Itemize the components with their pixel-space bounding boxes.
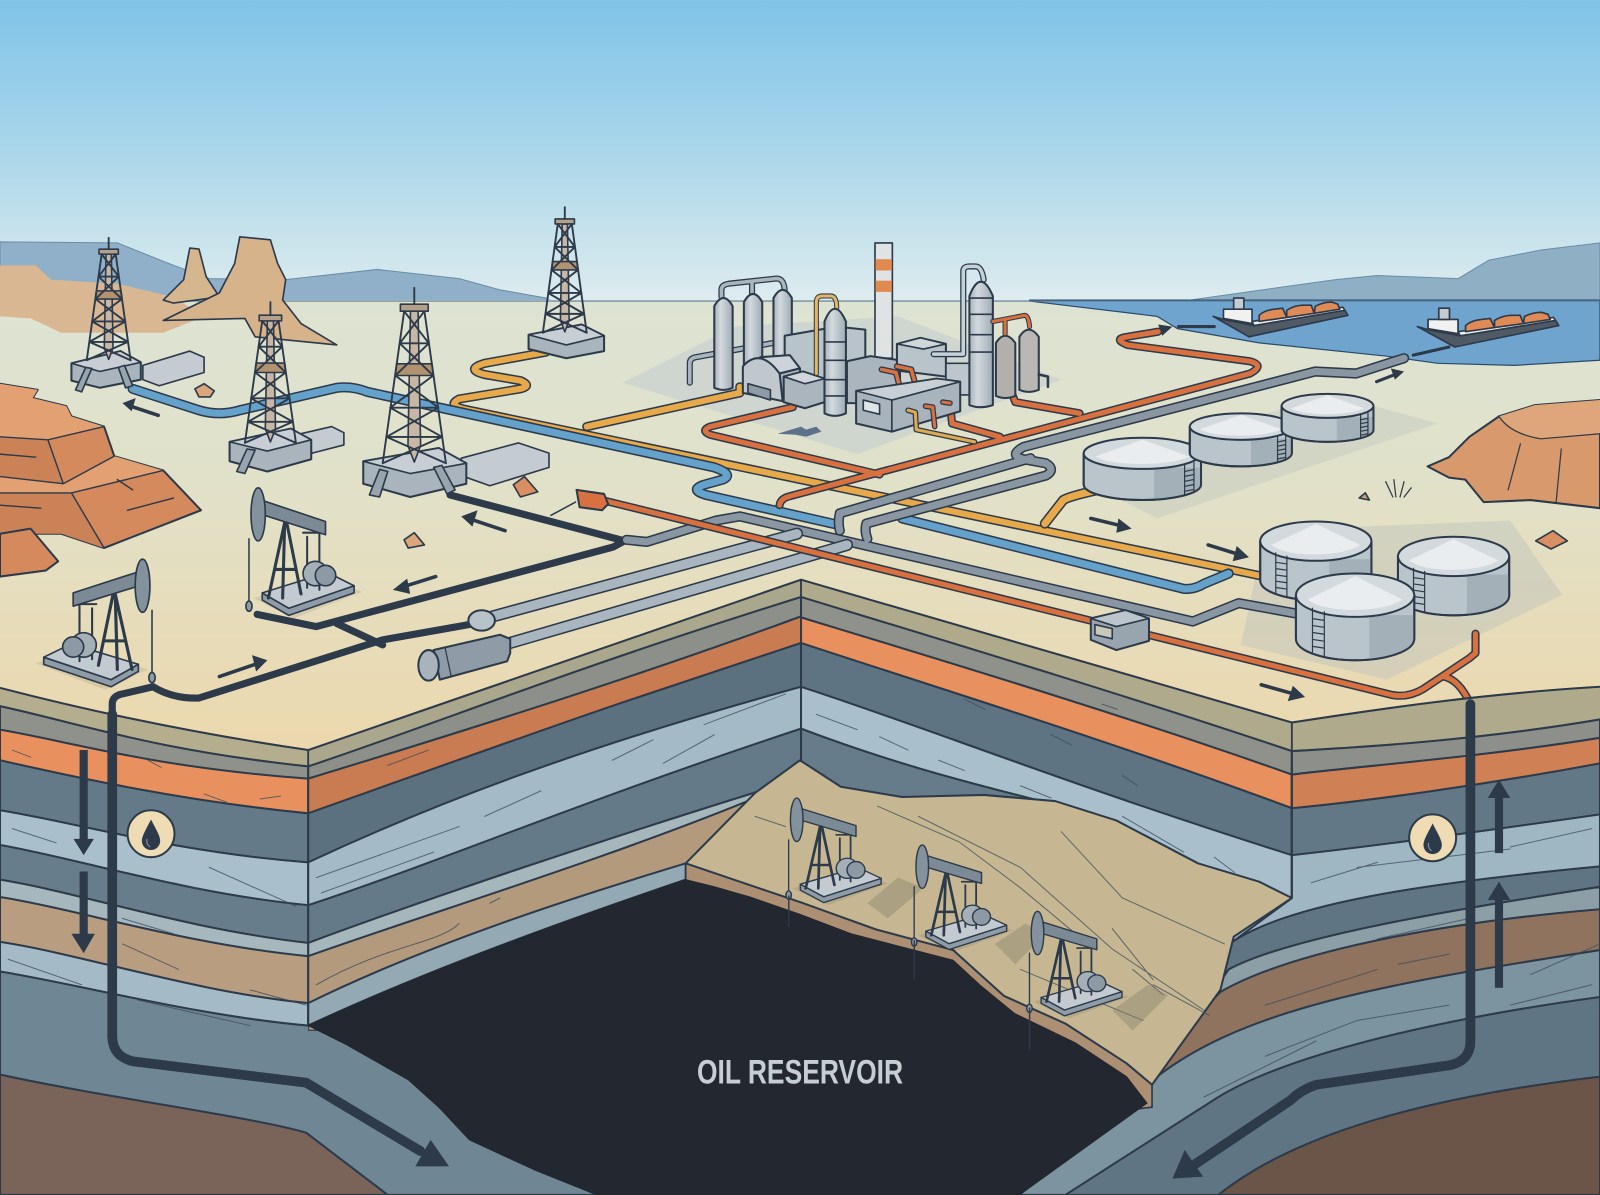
ship 2 — [1417, 308, 1559, 347]
yellow pipeline — [454, 352, 1259, 576]
cave wall rock — [686, 760, 1292, 1085]
upward arrows right — [1488, 780, 1510, 988]
shed — [301, 427, 344, 453]
pale — [1230, 814, 1600, 944]
shadow: lower tank row — [1241, 520, 1562, 680]
speckled — [309, 791, 756, 955]
derrick 3 — [363, 288, 549, 497]
texture marks — [816, 699, 1235, 872]
right geological block — [1019, 687, 1600, 1195]
dark slate — [1065, 997, 1600, 1195]
oil drop icon left — [128, 810, 174, 857]
loading hoses — [1179, 327, 1449, 355]
near orange mesa right — [1428, 400, 1600, 508]
oil drop icon right — [1409, 814, 1456, 861]
dark flowlines — [153, 495, 624, 698]
mesa body — [1428, 400, 1600, 508]
main orange pipeline — [602, 500, 1476, 704]
derrick 1 — [71, 238, 204, 392]
inner left pale lower layer — [308, 863, 686, 1026]
junction box — [1091, 610, 1149, 650]
inner left wall — [308, 580, 801, 1031]
mesa front tier — [0, 529, 58, 577]
block side pipes — [908, 406, 974, 442]
tank E — [1398, 537, 1509, 615]
tank F — [1296, 574, 1414, 660]
left geological block — [0, 688, 653, 1195]
gray — [802, 596, 1291, 773]
orange top pipe — [993, 315, 1030, 334]
pale slate — [1019, 950, 1600, 1195]
shadow: upper tank row — [1082, 393, 1438, 518]
tank B — [1190, 413, 1292, 466]
blue pipeline — [133, 387, 1229, 589]
distant hills right — [1183, 243, 1600, 301]
large spire — [163, 237, 337, 345]
pale — [802, 686, 1291, 940]
rock spires — [163, 237, 337, 345]
derrick 2 — [230, 302, 344, 474]
ground surface — [0, 300, 1600, 750]
mesa body — [0, 384, 201, 548]
column right — [969, 282, 993, 407]
downward arrows left — [71, 750, 95, 953]
right box — [897, 338, 946, 377]
base struts — [237, 449, 255, 474]
far beige mesa — [0, 265, 204, 333]
compressor cylinder — [418, 635, 510, 681]
arched building — [743, 355, 800, 401]
mesa top — [1499, 400, 1600, 439]
base struts — [76, 365, 133, 392]
rear low box — [946, 363, 969, 395]
orange layer — [1, 728, 308, 812]
header pipe over vessels — [721, 279, 785, 297]
tan — [308, 796, 760, 1031]
orange — [309, 616, 800, 812]
base block — [230, 429, 311, 471]
sea — [1030, 300, 1600, 365]
tier faces — [0, 437, 63, 484]
jack shadows — [867, 878, 1168, 1031]
orange pipelines — [705, 332, 1258, 505]
front block — [856, 379, 960, 432]
base block — [363, 448, 466, 497]
underground pumpjack 3 — [1027, 911, 1129, 1050]
derrick 4 — [529, 207, 604, 358]
pumpjack surface left — [35, 559, 155, 690]
orange — [802, 616, 1291, 806]
reservoir label: OIL RESERVOIR — [697, 1054, 903, 1092]
inner right wall — [802, 581, 1291, 940]
refinery — [690, 243, 1048, 442]
block orange feed — [943, 402, 950, 403]
tan layer — [1, 896, 308, 1002]
light layer — [1, 809, 308, 904]
gray layer — [0, 705, 308, 778]
texture marks — [316, 694, 786, 985]
yellow branch to tank — [1045, 489, 1103, 524]
small rocks — [195, 384, 1567, 549]
orange valve — [551, 490, 608, 515]
shadow: refinery — [622, 316, 1061, 454]
tower — [245, 302, 296, 443]
slate 2 — [1220, 866, 1600, 980]
pumpjack surface right — [246, 488, 362, 618]
speckled — [1194, 887, 1600, 1020]
mesa top face — [0, 384, 104, 440]
small vessels — [996, 330, 1048, 398]
pale layer — [1, 941, 308, 1024]
texture marks — [8, 750, 306, 1026]
slate 2 — [309, 728, 800, 942]
surface flow arrows — [122, 325, 1404, 701]
left base rock — [0, 1075, 388, 1195]
tower — [543, 207, 587, 333]
ship 1 — [1213, 298, 1348, 337]
chimney — [875, 243, 892, 358]
tower — [87, 238, 131, 360]
small spire — [163, 248, 219, 303]
mesa creases — [1499, 416, 1600, 502]
base block — [71, 351, 141, 388]
brown — [1019, 909, 1600, 1195]
deep slate layer — [0, 971, 653, 1195]
block roof pipes — [882, 366, 915, 388]
khaki — [802, 581, 1291, 750]
slate — [1292, 763, 1600, 898]
slate 2 — [802, 728, 1035, 798]
khaki — [1292, 687, 1600, 816]
tower — [383, 288, 446, 463]
gray — [1292, 719, 1600, 816]
tall vessels — [714, 290, 792, 390]
near orange mesa left — [0, 384, 201, 577]
yellow loop pipe — [816, 296, 837, 374]
light surface pipes from compressor — [493, 534, 847, 643]
shed — [461, 443, 549, 486]
base rock — [1218, 1077, 1600, 1195]
oil reservoir — [308, 880, 1147, 1195]
right well pipe — [1172, 704, 1470, 1179]
center box — [847, 356, 900, 403]
ground edge outline — [0, 580, 1600, 750]
back box — [785, 327, 865, 393]
khaki layer — [0, 688, 308, 766]
speckled layer — [1, 878, 308, 955]
lower tier top — [0, 456, 163, 493]
compressor flange — [468, 610, 495, 631]
slate layer 2 — [1, 844, 308, 942]
tank C — [1282, 394, 1373, 442]
sky — [0, 0, 1600, 302]
distant hills left — [0, 242, 551, 301]
base block — [529, 325, 604, 358]
left pipe behind vessels — [690, 343, 773, 383]
horizon line — [0, 300, 1600, 302]
gray — [309, 596, 800, 778]
pale — [309, 686, 800, 904]
khaki — [309, 581, 800, 765]
reservoir floor strip — [686, 863, 1152, 1122]
slate layer — [1, 759, 308, 862]
column left — [824, 309, 846, 416]
underground pumpjack 2 — [911, 845, 1014, 980]
lower tier front — [0, 493, 104, 548]
left well pipe — [112, 687, 449, 1166]
base struts — [369, 465, 455, 497]
tank A — [1084, 438, 1201, 500]
texture marks — [1204, 829, 1600, 1097]
tank D — [1260, 521, 1371, 600]
underground pumpjack 1 — [786, 798, 888, 927]
mesa creases — [0, 427, 173, 548]
gray pipelines — [627, 358, 1404, 621]
orange — [1292, 738, 1600, 857]
shed — [143, 351, 204, 386]
loop pipe right — [934, 266, 984, 354]
small box — [784, 371, 824, 408]
corner edges — [308, 580, 1292, 1026]
slate — [309, 642, 800, 861]
slate — [802, 642, 1291, 854]
